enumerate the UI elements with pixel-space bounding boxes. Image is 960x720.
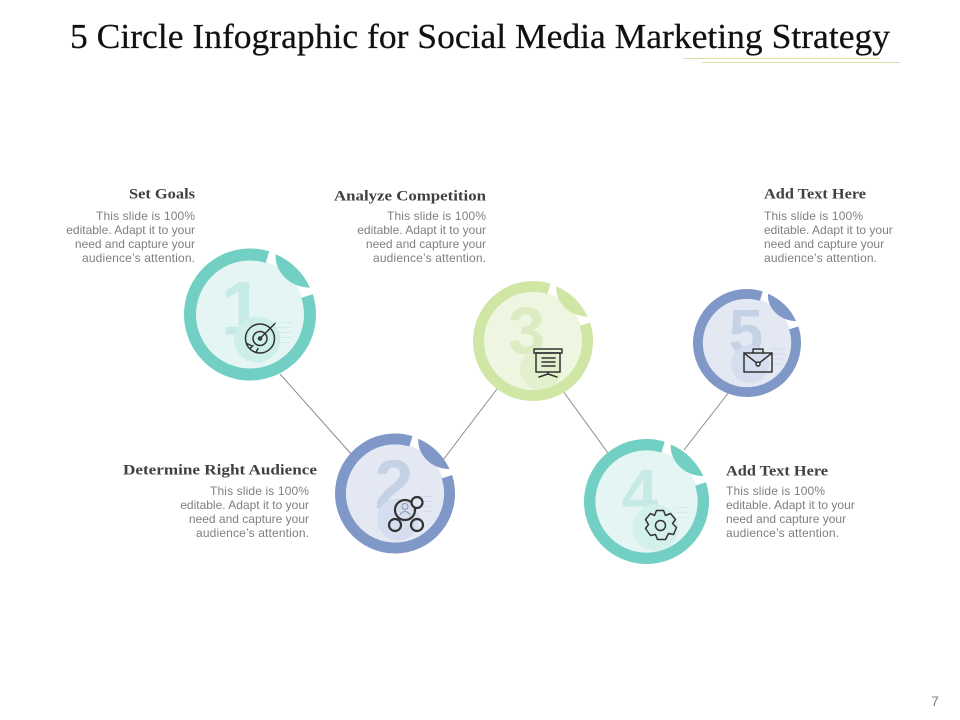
text block: determine right audience: audience’s attention. <box>196 526 309 540</box>
text block: analyze competition: editable. Adapt it to your <box>357 223 486 237</box>
icon: target <box>246 324 275 353</box>
text block: analyze competition: audience’s attention. <box>373 251 486 265</box>
text block: add text here top right: This slide is 100% <box>764 209 863 223</box>
text block: analyze competition: Analyze Competition <box>334 188 487 204</box>
text block: add text here bottom right: This slide is 100% <box>726 484 825 498</box>
text block: determine right audience: need and capture your <box>189 512 309 526</box>
circle 2: determine right audience <box>340 439 450 548</box>
text block: set goals: audience’s attention. <box>82 251 195 265</box>
text block: analyze competition: This slide is 100% <box>387 209 486 223</box>
text block: add text here top right: editable. Adapt it to your <box>764 223 893 237</box>
text block: add text here bottom right: audience’s attention. <box>726 526 839 540</box>
number 1: 1 <box>221 266 263 352</box>
title underline <box>683 58 900 62</box>
text block: set goals: editable. Adapt it to your <box>66 223 195 237</box>
circle 1: set goals <box>190 254 310 374</box>
number 5: 5 <box>729 298 763 367</box>
text block: add text here bottom right: need and capture your <box>726 512 846 526</box>
text block: determine right audience: This slide is 100% <box>210 484 309 498</box>
text block: set goals: need and capture your <box>75 237 195 251</box>
icon: people network <box>389 497 423 531</box>
text block: add text here bottom right <box>726 464 855 540</box>
circle 3: analyze competition <box>478 286 588 396</box>
icon: presentation board <box>534 349 562 377</box>
circle 4: add text here <box>590 444 703 558</box>
text block: add text here top right: need and capture your <box>764 237 884 251</box>
text block: set goals: Set Goals <box>129 186 195 202</box>
text block: determine right audience <box>123 462 317 540</box>
text block: set goals: This slide is 100% <box>96 209 195 223</box>
circle 5: add text here <box>698 294 796 392</box>
text block: add text here bottom right: editable. Adapt it to your <box>726 498 855 512</box>
number 3: 3 <box>508 294 545 369</box>
text block: set goals <box>66 186 195 265</box>
title: 5 Circle Infographic for Social Media Marketing Strategy <box>70 17 891 56</box>
number 4: 4 <box>622 456 659 530</box>
text block: analyze competition <box>334 188 487 265</box>
icon: gear <box>646 510 676 540</box>
page number: 7 <box>931 693 939 709</box>
icon: briefcase <box>744 349 772 372</box>
text block: determine right audience: editable. Adapt it to your <box>180 498 309 512</box>
connector lines <box>280 374 729 460</box>
text block: determine right audience: Determine Right Audience <box>123 462 317 478</box>
text block: add text here bottom right: Add Text Here <box>726 464 828 480</box>
text block: add text here top right: Add Text Here <box>764 186 866 202</box>
text block: add text here top right <box>764 186 893 265</box>
text block: add text here top right: audience’s attention. <box>764 251 877 265</box>
number 2: 2 <box>375 446 413 524</box>
text block: analyze competition: need and capture your <box>366 237 486 251</box>
